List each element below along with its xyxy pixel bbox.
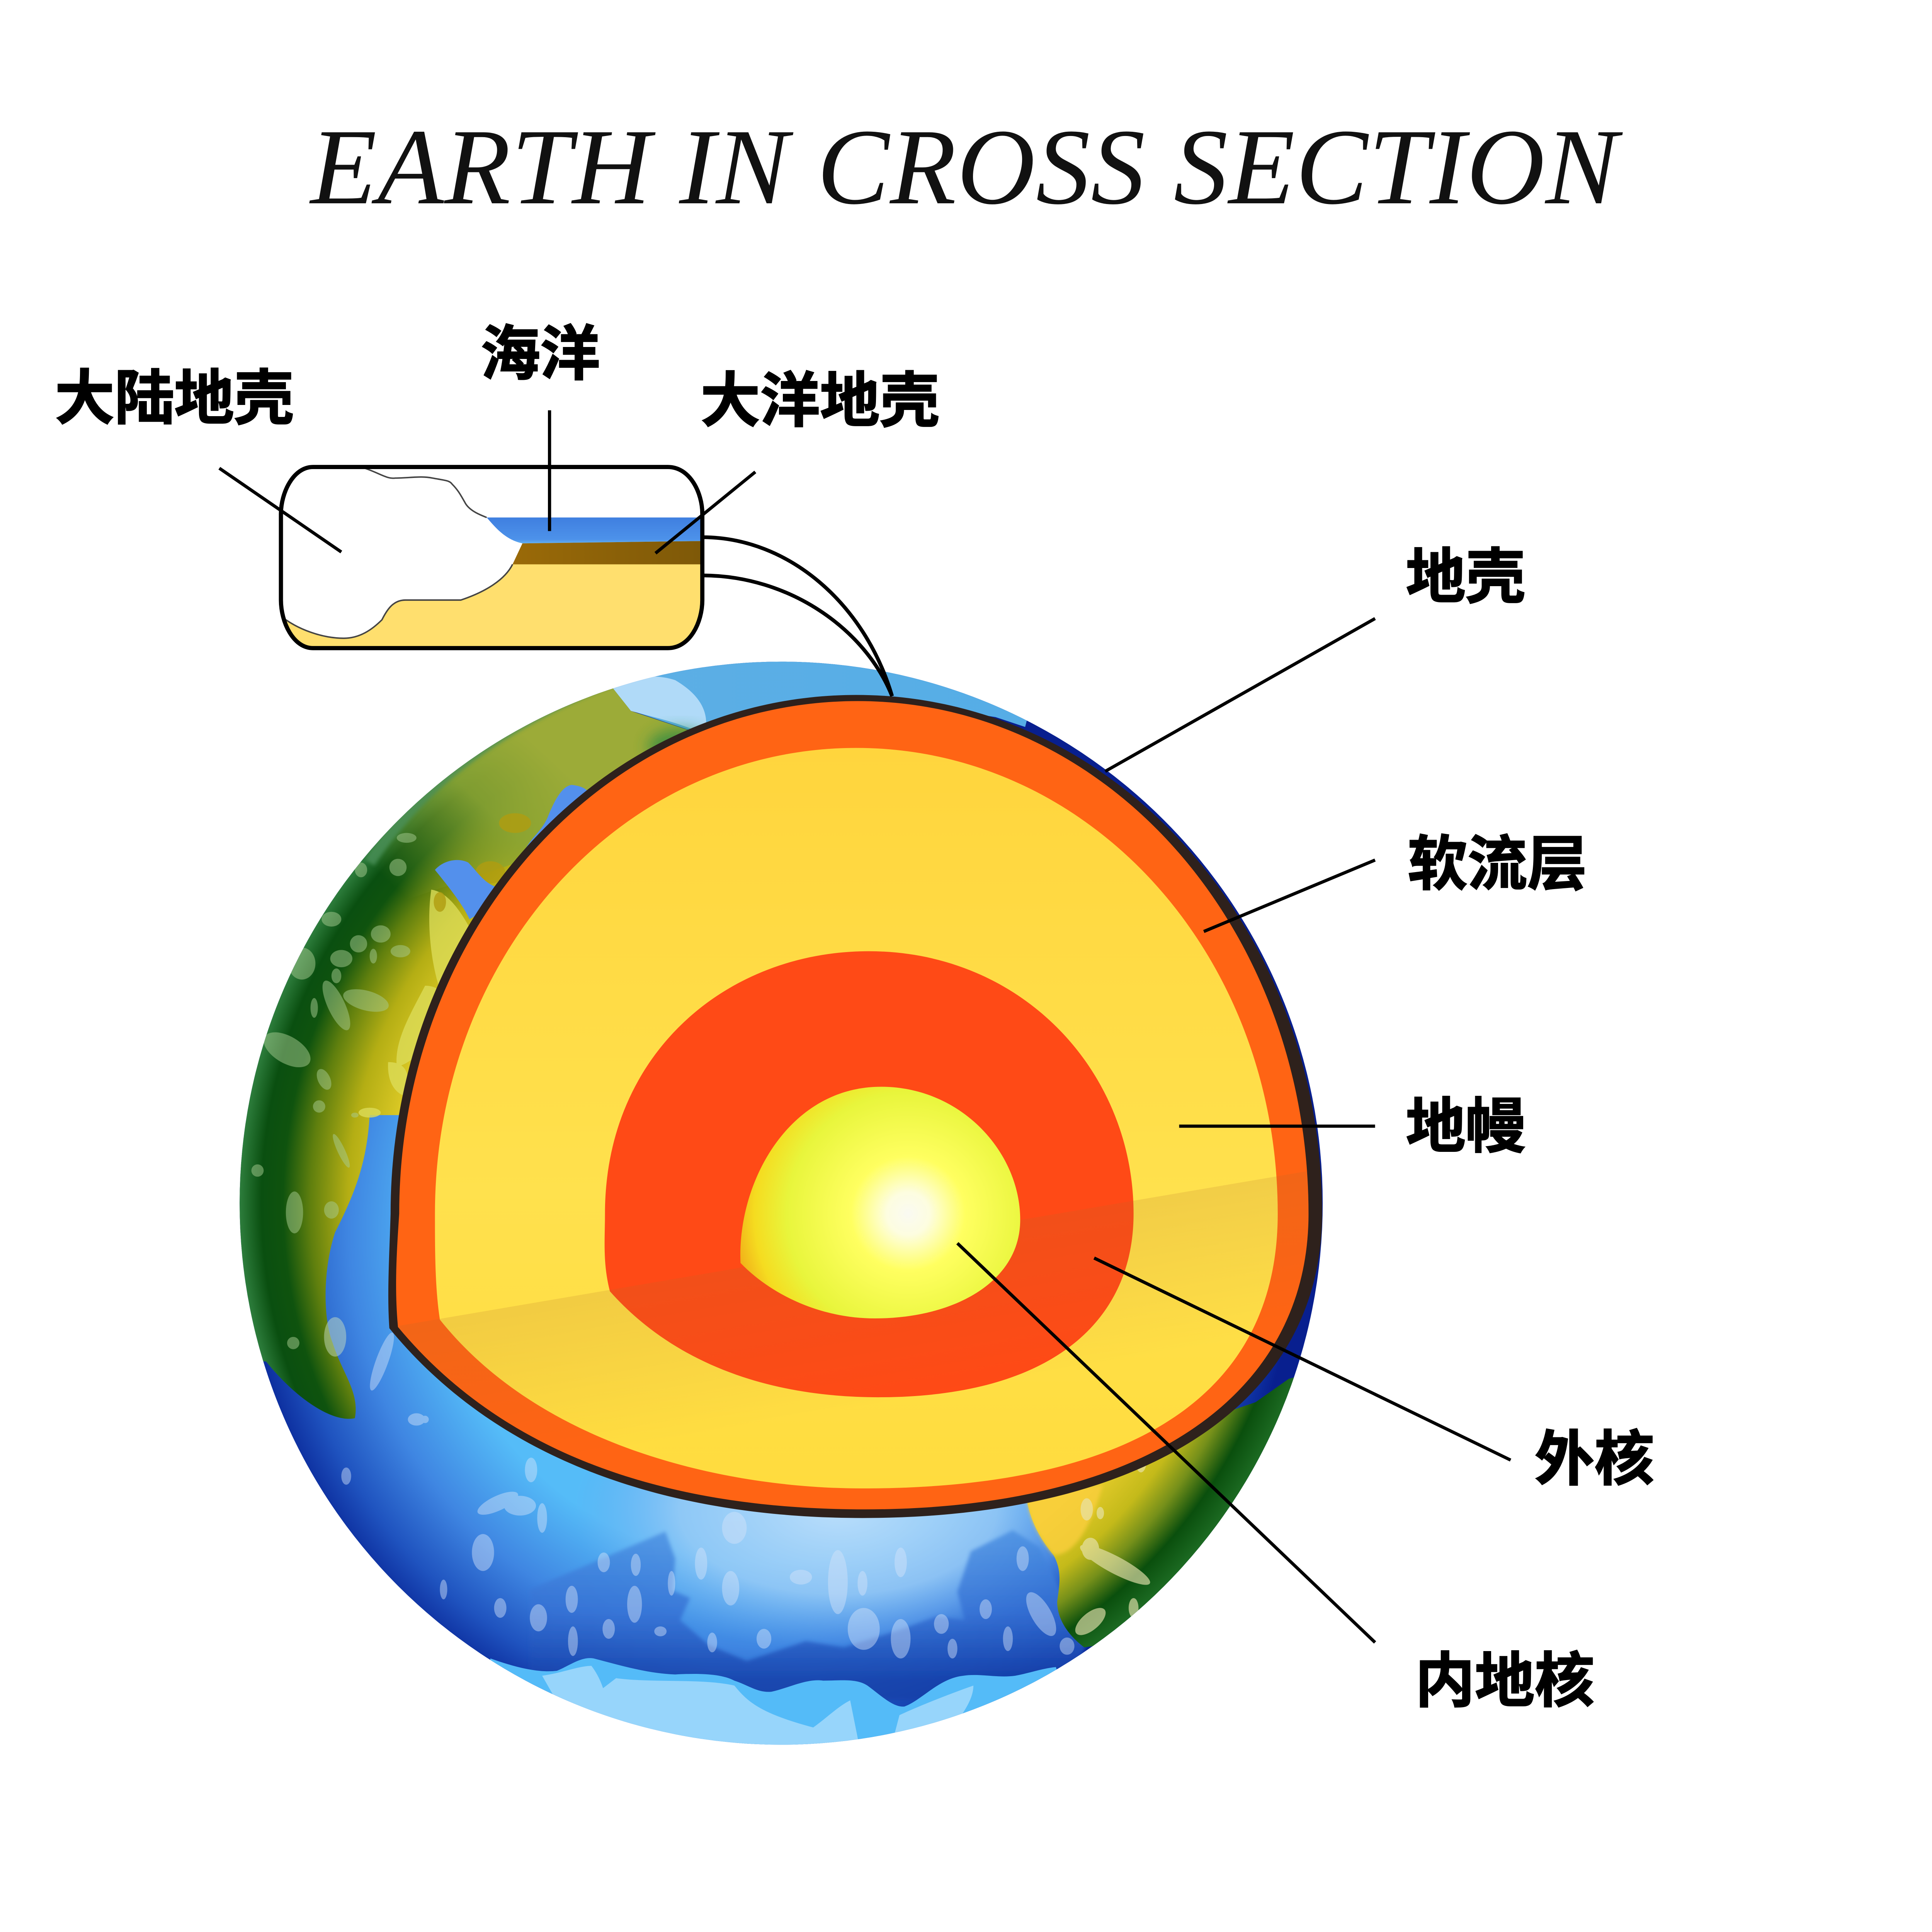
ocean light flecks	[341, 1330, 1075, 1658]
label: mantle: 地幔	[1406, 1093, 1526, 1160]
connector curves from inset to globe	[702, 537, 892, 696]
southeast light patches	[1071, 1443, 1154, 1640]
polar ice strip	[468, 1658, 1084, 1774]
label: oceanic crust: 大洋地壳	[701, 367, 939, 434]
upper limb tint	[370, 680, 612, 862]
leader line: oceanic crust	[655, 472, 755, 553]
inset: crust detail	[277, 467, 709, 653]
top ocean arc	[613, 662, 1027, 730]
western continent	[185, 592, 709, 1419]
inset continental crust edge	[286, 468, 513, 638]
leader line: inner core	[957, 1243, 1375, 1643]
globe exterior	[240, 662, 1323, 1745]
inset oceanic crust	[513, 541, 709, 564]
ocean highlight	[604, 1479, 1059, 1640]
inset mantle layer	[277, 564, 709, 653]
infographic canvas	[56, 131, 1654, 1745]
polar ice patch	[612, 677, 706, 735]
inner core	[740, 1087, 1020, 1318]
leader line: asthenosphere	[1204, 860, 1375, 932]
crust outline	[388, 695, 1322, 1518]
southeast continent	[1026, 1355, 1380, 1647]
inland sea	[435, 860, 497, 919]
leader line: continental crust	[219, 468, 341, 552]
inset ocean water	[487, 517, 709, 543]
label: crust: 地壳	[1406, 544, 1526, 611]
label: outer core: 外核	[1535, 1426, 1654, 1493]
leader line: crust	[1105, 619, 1375, 771]
asthenosphere	[396, 701, 1308, 1509]
southeast coastal warm tint	[1026, 1485, 1103, 1555]
northern inlet	[524, 785, 592, 853]
outer core	[605, 951, 1134, 1397]
inset layers	[277, 517, 709, 653]
upper continent shading	[345, 665, 709, 912]
leader line: ocean	[549, 410, 550, 531]
title: EARTH IN CROSS SECTION	[309, 107, 1623, 227]
leader line: mantle	[1179, 1126, 1375, 1127]
forest light patches	[252, 833, 417, 1357]
label: inner core: 内地核	[1415, 1648, 1594, 1714]
lower plane shading	[370, 1170, 1331, 1528]
green shade at continent edge	[648, 730, 712, 764]
mantle	[435, 748, 1278, 1488]
label: asthenosphere: 软流层	[1408, 831, 1587, 898]
inset frame	[281, 467, 702, 648]
polar ice light patches	[542, 1666, 973, 1762]
coastal yellow patches	[359, 889, 474, 1117]
deep ocean lobes	[530, 1530, 1085, 1701]
olive patches	[434, 813, 531, 912]
label: ocean: 海洋	[481, 320, 600, 387]
ocean base	[239, 661, 1323, 1745]
leader line: outer core	[1094, 1258, 1510, 1460]
label: continental crust: 大陆地壳	[55, 365, 294, 432]
cutaway section	[370, 695, 1331, 1528]
